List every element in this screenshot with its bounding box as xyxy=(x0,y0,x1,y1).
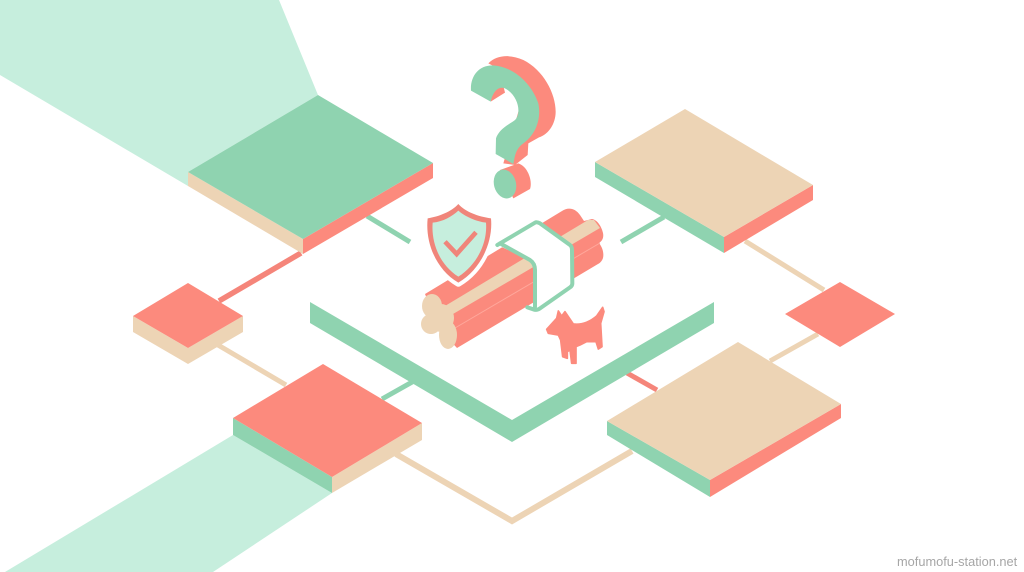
connector lines xyxy=(218,216,824,521)
panel: left small salmon tile xyxy=(133,283,243,364)
panel: right small salmon tile xyxy=(785,282,895,347)
icon: bundle of logs with band xyxy=(421,209,603,349)
icon: dog xyxy=(547,307,604,363)
light green beam: bottom left xyxy=(5,435,332,572)
panel: bottom left salmon platform xyxy=(233,364,422,493)
green chevron bracket xyxy=(310,302,714,442)
panel: top right tan platform xyxy=(595,109,813,253)
light green beam: top left xyxy=(0,0,318,186)
watermark: mofumofu-station.net xyxy=(897,554,1017,569)
icon: shield with check xyxy=(427,204,491,283)
panel: top left green platform xyxy=(188,95,433,254)
panel: bottom right tan platform xyxy=(607,342,841,497)
icon: question mark xyxy=(471,56,556,201)
